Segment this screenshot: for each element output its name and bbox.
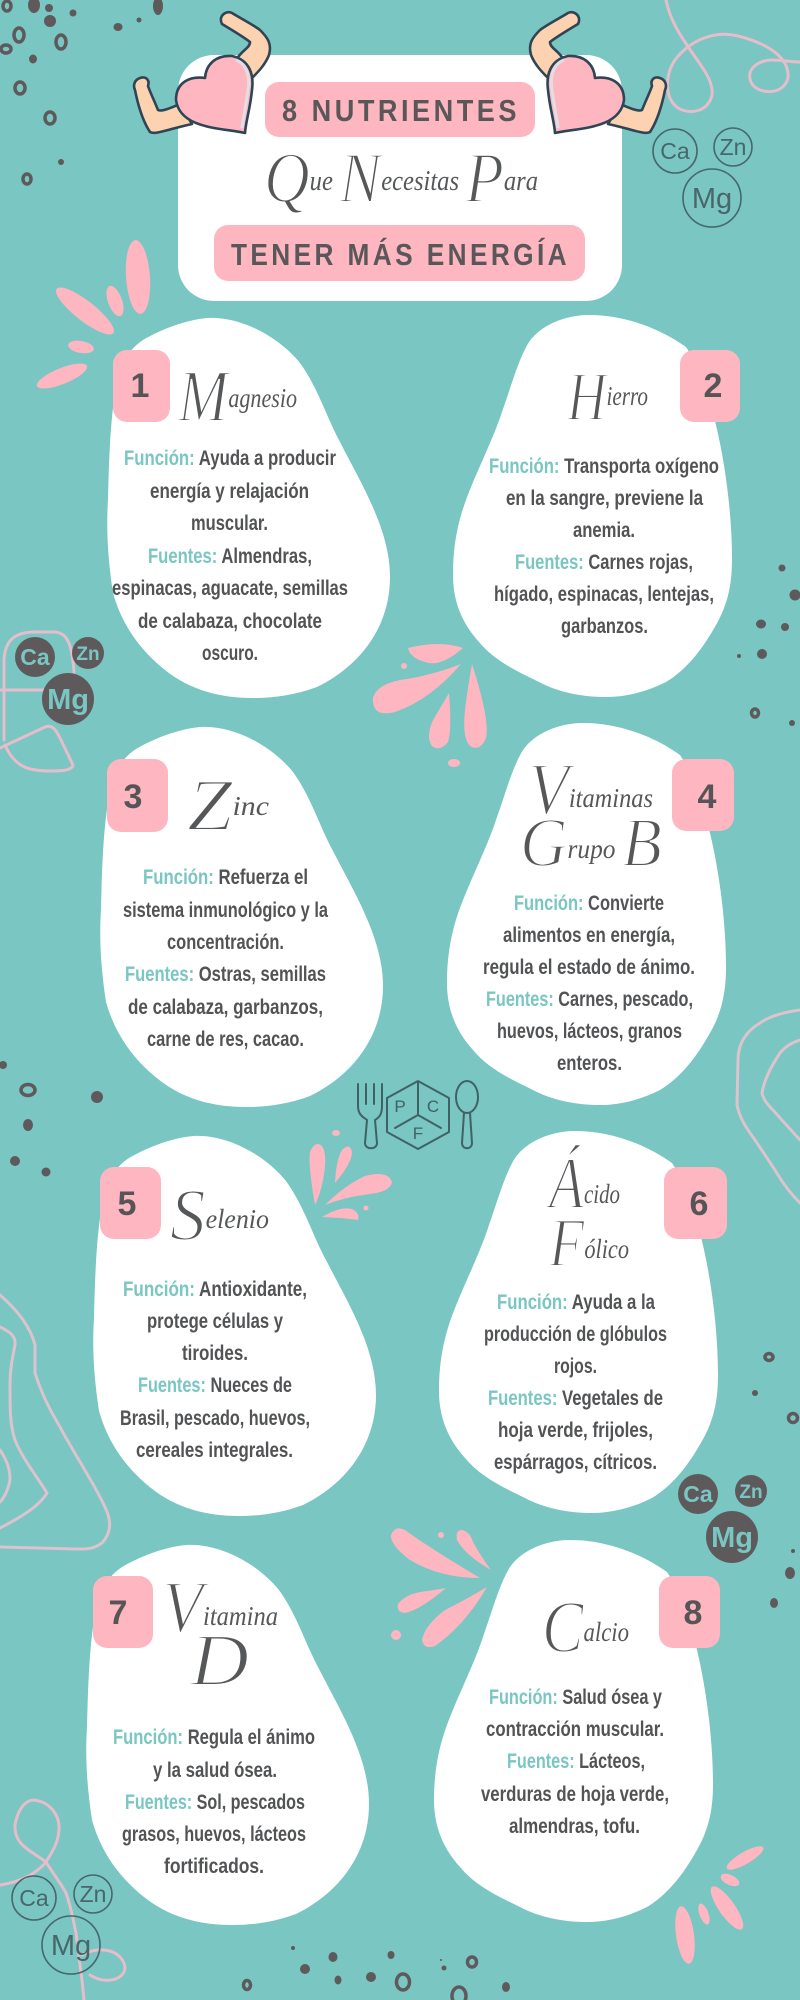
card text: fortificados. [164,1855,264,1878]
dots: left of card 3 and card 5 [0,1061,103,1176]
filled elements: below card 6: Ca [683,1481,713,1507]
card title: V [528,749,576,831]
card title: alcio [584,1617,629,1647]
panel: card 2 hierro [453,315,740,697]
card text: Función: Ayuda a la [497,1291,655,1314]
card text: grasos, huevos, lácteos [122,1823,306,1846]
squiggle: bottom left [0,1800,125,2000]
card text: alimentos en energía, [503,924,675,947]
dots: right of card 8 [770,1549,795,1608]
panel: white title card [178,55,622,301]
number badge 6: 6 [690,1185,708,1223]
element badges: outlined Ca Zn Mg bottom left: Ca [19,1885,49,1911]
card text: sistema inmunológico y la [123,899,328,922]
number badge 3: 3 [124,778,142,816]
card text: espinacas, aguacate, semillas [112,577,348,600]
pink squiggle and filled elements: left of card 1: Zn [76,644,100,665]
pink squiggle and filled elements: left of card 1: Ca [20,644,50,670]
panel: card 4 vitaminas grupo b [447,723,734,1105]
pink splash: right of card 5 [310,1130,392,1220]
number badge 3 [107,759,168,832]
card text: hoja verde, frijoles, [498,1419,653,1442]
card text: Fuentes: Nueces de [138,1374,292,1397]
heading script: que necesitas para: ecesitas [381,166,465,197]
card text: Brasil, pescado, huevos, [120,1407,310,1430]
card title: elenio [206,1204,269,1234]
dots: right of card 2 [737,564,800,726]
panel: card 6 ácido fólico [439,1131,727,1513]
card text: enteros. [557,1052,622,1075]
card title: B [622,805,662,882]
element badges: outlined Ca Zn Mg top right: Zn [720,134,746,160]
filled elements: below card 6: Mg [711,1522,753,1554]
card text: cereales integrales. [136,1439,293,1462]
card text [489,455,719,638]
heading script: que necesitas para: ue [310,166,339,197]
dots: bottom [244,1946,510,2000]
element badges: outlined Ca Zn Mg top right: Ca [660,138,690,164]
card title: itaminas [569,783,653,813]
card title: cido [584,1179,620,1209]
card text: regula el estado de ánimo. [483,956,695,979]
number badge 8 [659,1576,720,1648]
icon: flexing heart right [530,12,666,133]
icon: fork, PCF hexagon and spoon: F [413,1124,423,1143]
number badge 1: 1 [131,367,149,405]
card text: tiroides. [182,1342,248,1365]
element badges: outlined Ca Zn Mg bottom left [12,1875,112,1974]
number badge 6 [664,1167,727,1239]
card title [545,1143,629,1282]
heading pill: 8 nutrientes [265,82,535,137]
card text: protege células y [147,1310,283,1333]
pink shapes: bottom right [672,1842,766,1965]
card title: C [542,1587,585,1669]
panel: card 7 vitamina d [86,1545,369,1925]
card title: Z [187,765,233,847]
card title: itamina [203,1601,278,1631]
card text: muscular. [191,512,268,535]
card text: Función: Convierte [514,892,664,915]
card text: verduras de hoja verde, [481,1783,669,1806]
card text: contracción muscular. [486,1718,664,1741]
card title: S [170,1175,206,1257]
pink splash: between cards 7 and 8 [391,1528,491,1647]
number badge 4 [672,759,734,831]
card title: F [548,1205,585,1282]
heading pill: 8 nutrientes: 8 NUTRIENTES [282,93,520,128]
pink squiggle and filled elements: left of card 1 [0,632,104,771]
card text: energía y relajación [150,480,309,503]
number badge 5 [100,1167,161,1239]
card text [481,1686,669,1838]
card text [483,892,695,1075]
filled elements: below card 6 [678,1474,767,1563]
heading script: que necesitas para: N [338,138,385,218]
number badge 5: 5 [118,1185,136,1223]
panel: card 3 zinc [100,727,383,1107]
element badges: outlined Ca Zn Mg bottom left: Zn [80,1881,106,1907]
dots: top left [1,0,163,184]
squiggle: top right [666,0,800,112]
card title [520,749,662,882]
number badge 8: 8 [684,1594,702,1632]
panel: card 5 selenio [93,1136,376,1516]
card text: Fuentes: Sol, pescados [125,1791,305,1814]
number badge 7 [93,1576,153,1648]
card title [162,1567,278,1702]
card title: V [162,1567,210,1649]
pink splash: top left [34,239,153,394]
card text: Función: Ayuda a producir [124,447,336,470]
card text: almendras, tofu. [509,1815,640,1838]
panel: card 1 magnesio [107,318,390,698]
header panel [178,55,622,301]
card text: Función: Refuerza el [143,866,308,889]
swirl: right side [737,1010,800,1203]
card text: anemia. [573,519,635,542]
pink squiggle and filled elements: left of card 1: Mg [47,684,89,716]
heading pill: tener más energía: TENER MÁS ENERGÍA [231,237,570,272]
card title: H [566,359,609,436]
card title: ólico [584,1234,629,1264]
filled elements: below card 6: Zn [739,1482,763,1503]
heading script: que necesitas para: Q [264,138,310,218]
card text: carne de res, cacao. [147,1028,304,1051]
card text [113,1726,315,1878]
card title: G [520,805,568,882]
card text: Fuentes: Lácteos, [507,1750,645,1773]
element badges: outlined Ca Zn Mg top right: Mg [692,183,732,215]
card text: concentración. [167,931,284,954]
number badge 1 [113,350,170,422]
card title: inc [233,791,269,821]
heading pill: tener más energía [214,225,585,281]
number badge 7: 7 [109,1594,127,1632]
card text: en la sangre, previene la [506,487,703,510]
card text: huevos, lácteos, granos [497,1020,682,1043]
card text: Función: Salud ósea y [489,1686,662,1709]
card text: rojos. [554,1355,597,1378]
card text [112,447,348,665]
icon: flexing heart left [134,12,270,133]
card text: Fuentes: Almendras, [148,545,312,568]
dots: right of card 6 [752,1354,798,1422]
number badge 2: 2 [704,367,722,405]
element badges: outlined Ca Zn Mg top right [653,128,752,227]
card text: Fuentes: Carnes, pescado, [486,988,693,1011]
card text: Función: Antioxidante, [123,1278,307,1301]
card title: ierro [607,381,648,411]
number badge 2 [680,350,740,422]
card text [123,866,328,1051]
number badge 4: 4 [698,778,717,816]
card text: Fuentes: Vegetales de [488,1387,663,1410]
card text: de calabaza, garbanzos, [128,996,323,1019]
card text: espárragos, cítricos. [494,1451,657,1474]
card title: M [177,356,232,438]
element badges: outlined Ca Zn Mg bottom left: Mg [51,1930,91,1962]
icon: fork, PCF hexagon and spoon: C [427,1097,439,1116]
card text: hígado, espinacas, lentejas, [494,583,714,606]
heading script: que necesitas para: P [464,138,504,218]
card title: agnesio [228,383,297,413]
card text: Función: Regula el ánimo [113,1726,315,1749]
panel: card 8 calcio [434,1540,720,1922]
pink splash: between cards 1 and 2 [373,644,487,767]
card title: rupo [568,834,622,864]
card text [484,1291,667,1474]
card text: producción de glóbulos [484,1323,667,1346]
card text: Fuentes: Carnes rojas, [515,551,693,574]
swirl: left side [0,1295,110,1549]
card text: garbanzos. [561,615,648,638]
card text: Fuentes: Ostras, semillas [125,963,326,986]
icon: fork, PCF hexagon and spoon [358,1081,478,1149]
card text: de calabaza, chocolate [138,610,322,633]
heading script: que necesitas para: ara [504,166,538,197]
card text: oscuro. [202,642,258,665]
card text [120,1278,310,1462]
card text: y la salud ósea. [153,1759,277,1782]
card title: Á [545,1143,585,1225]
card title: D [189,1620,249,1702]
icon: fork, PCF hexagon and spoon: P [394,1097,406,1116]
card text: Función: Transporta oxígeno [489,455,719,478]
